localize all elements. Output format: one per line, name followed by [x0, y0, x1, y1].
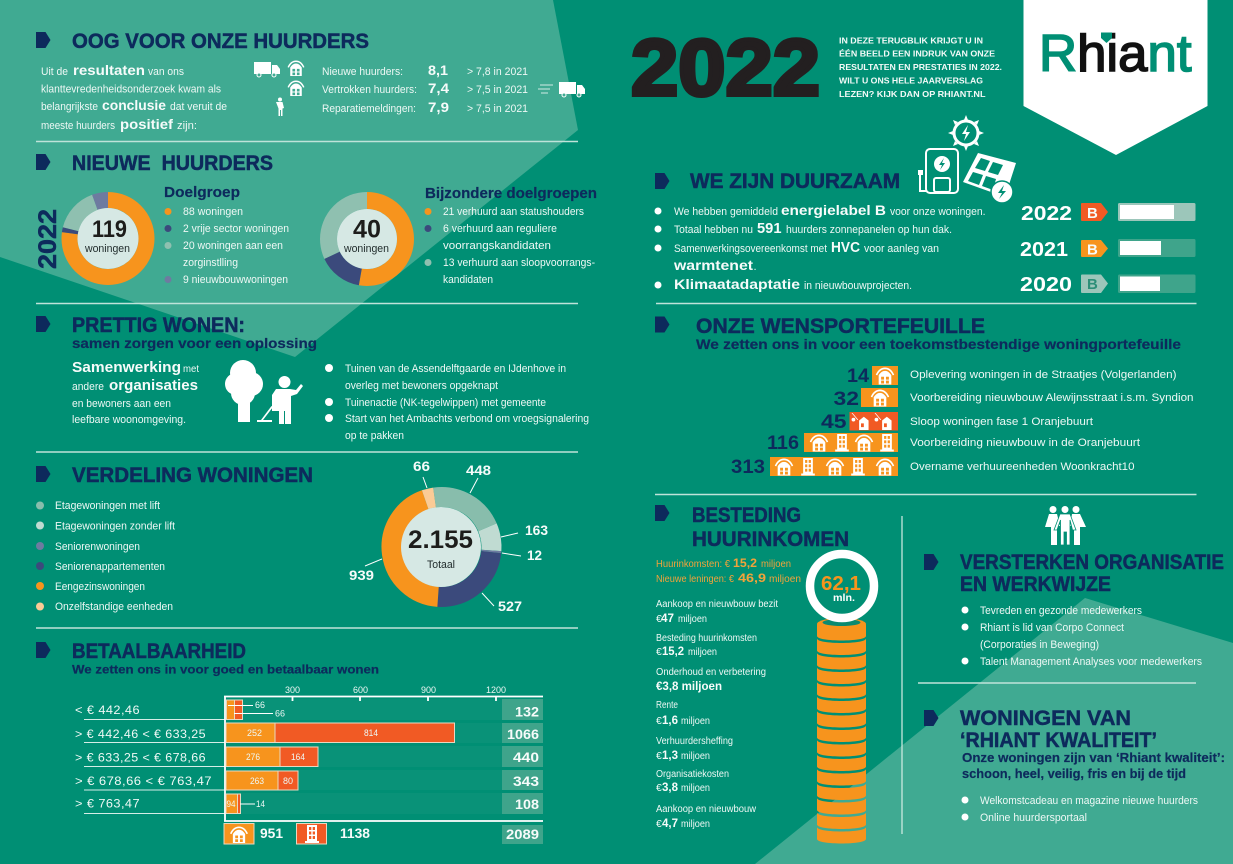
text block: Samenwerking: [72, 359, 181, 376]
bar chart: 600: [353, 685, 368, 695]
legend: Eengezinswoningen: [55, 581, 145, 593]
big year title: 2022: [631, 23, 820, 112]
spending list: Rente: [656, 700, 678, 711]
spending list: Aankoop en nieuwbouw: [656, 804, 757, 815]
bar chart: 14: [256, 799, 265, 809]
icon: house: [288, 60, 304, 76]
panel: woningen van rhiant kwaliteit: schoon, heel, veilig, fris en bij de tijd: [962, 766, 1186, 781]
heading: VERDELING WONINGEN: [72, 464, 313, 487]
row: 14: 14: [847, 366, 869, 387]
spending list: 1,3: [662, 748, 678, 762]
bullet list: voor onze woningen.: [890, 206, 986, 218]
chart legend: house total: 951: [260, 825, 283, 841]
background shape: top left: [0, 0, 578, 357]
label row 2022: B: [1087, 205, 1098, 222]
donut chart: total: [385, 491, 498, 603]
total circle: [810, 554, 874, 618]
income totals: Huurinkomsten: €: [656, 559, 730, 570]
row totals: 343: [513, 773, 539, 789]
intro text: van ons: [148, 66, 184, 78]
donut labels: 527: [498, 598, 522, 614]
bullet list: warmtenet: [673, 257, 753, 273]
total circle: mln.: [833, 593, 855, 604]
intro text: [839, 36, 1002, 99]
intro text: LEZEN? KIJK DAN OP RHIANT.NL: [839, 89, 986, 99]
donut labels: 163: [525, 522, 548, 538]
donut labels: 939: [349, 567, 374, 583]
spending list: Organisatiekosten: [656, 769, 729, 780]
panel: woningen van rhiant kwaliteit: ‘RHIANT KWALITEIT’: [960, 729, 1157, 752]
donut labels: 12: [527, 547, 542, 563]
intro text: Uit de: [41, 66, 68, 78]
section marker: [36, 316, 50, 332]
row: 32: Voorbereiding nieuwbouw Alewijnsstraat i.s.m. Syndion: [910, 392, 1194, 404]
row: 45: [821, 412, 1093, 433]
scores table: > 7,5 in 2021: [467, 103, 528, 115]
bullet list: HVC: [831, 240, 860, 256]
spending list: 1,6: [662, 713, 678, 727]
spending list: €: [656, 782, 662, 794]
bullet list: in nieuwbouwprojecten.: [804, 280, 912, 292]
text block: leefbare woonomgeving.: [72, 414, 186, 426]
spending list: [656, 599, 778, 830]
label row 2021: 2021: [1020, 239, 1068, 261]
icon: three people: [1045, 506, 1086, 545]
panel: versterken organisatie: EN WERKWIJZE: [960, 573, 1111, 596]
spending list: Verhuurdersheffing: [656, 736, 733, 747]
bullet list: Talent Management Analyses voor medewerkers: [980, 656, 1202, 668]
text block: [72, 359, 199, 426]
legend: doelgroep: 20 woningen aan een: [183, 240, 283, 252]
bar chart: 94: [226, 799, 236, 809]
legend: Seniorenappartementen: [55, 561, 165, 573]
bar chart: 66: [255, 700, 265, 710]
bar chart: 263: [250, 776, 264, 786]
row labels: [75, 703, 225, 814]
heading: NIEUWE HUURDERS: [72, 152, 273, 175]
panel: besteding huurinkomen: HUURINKOMEN: [692, 528, 849, 551]
row: 45: 45: [821, 412, 847, 433]
bullet list: 591: [757, 220, 782, 237]
donut chart: doelgroep: [70, 200, 146, 277]
bullet list: [962, 605, 1202, 668]
heading: BESTEDING: [692, 504, 801, 527]
spending list: miljoen: [681, 782, 710, 794]
heading: WONINGEN VAN: [960, 707, 1131, 730]
bullet list: Start van het Ambachts verbond om vroegsignalering: [345, 413, 589, 425]
bullet list: Tevreden en gezonde medewerkers: [980, 605, 1142, 617]
label row 2020: [1020, 274, 1196, 296]
intro text: positief: [120, 116, 173, 132]
panel: prettig wonen: [36, 314, 589, 442]
intro text: dat veruit de: [170, 101, 227, 113]
legend: bijzondere doelgroepen: kandidaten: [443, 274, 493, 286]
legend: bijzondere doelgroepen: 6 verhuurd aan reguliere: [443, 223, 557, 235]
subheading: We zetten ons in voor goed en betaalbaar wonen: [72, 662, 379, 676]
row totals: 440: [513, 749, 539, 765]
intro text: meeste huurders: [41, 120, 115, 132]
section marker: [36, 642, 50, 658]
label row 2021: B: [1087, 242, 1098, 258]
subheading: samen zorgen voor een oplossing: [72, 335, 317, 351]
section marker: [924, 710, 938, 726]
panel: we zijn duurzaam: [654, 115, 1196, 296]
bullet list: .: [754, 261, 757, 273]
text block: andere: [72, 381, 104, 393]
spending list: Besteding huurinkomsten: [656, 633, 757, 644]
row: 116: [767, 433, 1140, 454]
bullet list: energielabel B: [781, 203, 886, 218]
bullet list: Klimaatadaptatie: [674, 276, 800, 292]
panel: nieuwe huurders: [34, 152, 597, 286]
spending list: €: [656, 818, 662, 830]
donut chart: doelgroep: woningen: [84, 243, 130, 255]
row labels: < € 442,46: [75, 703, 140, 717]
intro text: IN DEZE TERUGBLIK KRIJGT U IN: [839, 36, 983, 46]
bar chart: 814: [364, 728, 378, 738]
row labels: > € 442,46 < € 633,25: [75, 727, 206, 741]
legend: bijzondere doelgroepen: voorrangskandidaten: [443, 240, 551, 252]
label row 2022: 2022: [1021, 203, 1072, 225]
bullet list: op te pakken: [345, 430, 404, 442]
bar chart: 276: [246, 752, 260, 762]
bullet list: (Corporaties in Beweging): [980, 639, 1099, 651]
section marker: [655, 505, 670, 521]
icon: sun and solar panels: [918, 115, 1016, 203]
logo badge: [1024, 0, 1208, 155]
spending list: Aankoop en nieuwbouw bezit: [656, 599, 778, 610]
row totals: 2089: [506, 826, 539, 842]
row totals: 108: [515, 796, 539, 812]
bar chart: 1200: [486, 685, 506, 695]
subheading: Onze woningen zijn van ‘Rhiant kwaliteit’:: [962, 750, 1225, 765]
row totals: 132: [515, 704, 539, 720]
bar chart: 66: [275, 708, 285, 718]
bullet list: We hebben gemiddeld: [674, 206, 778, 218]
spending list: miljoen: [681, 750, 710, 762]
label row 2022: [1021, 203, 1196, 225]
legend: Etagewoningen zonder lift: [55, 520, 175, 532]
bullet list: [654, 203, 986, 292]
legend: Seniorenwoningen: [55, 541, 140, 553]
coin stack: [817, 618, 866, 844]
bar chart: [224, 685, 543, 821]
chart legend: house total: [224, 824, 283, 844]
scores table: > 7,8 in 2021: [467, 66, 528, 78]
background shape: bottom right: [755, 598, 1233, 864]
bullet list: Online huurdersportaal: [980, 812, 1087, 824]
intro text: conclusie: [102, 97, 166, 113]
income totals: 15,2: [733, 556, 757, 570]
heading: BETAALBAARHEID: [72, 640, 246, 663]
income totals: 46,9: [738, 571, 766, 585]
donut chart: bijzondere doelgroepen: 40: [353, 216, 381, 244]
section marker: [655, 316, 670, 332]
heading: OOG VOOR ONZE HUURDERS: [72, 30, 369, 53]
spending list: 3,8: [662, 780, 678, 794]
label row 2021: [1020, 239, 1196, 261]
scores table: Vertrokken huurders:: [322, 84, 417, 96]
spending list: €: [656, 613, 662, 625]
legend: doelgroep: 88 woningen: [183, 206, 243, 218]
heading: WE ZIJN DUURZAAM: [690, 170, 900, 193]
chart legend: apartment total: [296, 824, 370, 844]
section marker: [36, 32, 50, 48]
donut chart: total: 2.155: [408, 526, 473, 554]
legend: Onzelfstandige eenheden: [55, 601, 173, 613]
spending list: 15,2: [662, 644, 684, 658]
bar chart: 300: [285, 685, 300, 695]
panel: onze wensportefeuille: [655, 315, 1194, 478]
row labels: > € 633,25 < € 678,66: [75, 750, 206, 764]
income totals: Nieuwe leningen: €: [656, 574, 734, 585]
row: 313: Overname verhuureenheden Woonkracht10: [910, 461, 1134, 473]
bullet list: Tuinenactie (NK-tegelwippen) met gemeente: [345, 397, 546, 409]
energy labels: [1020, 203, 1196, 296]
legend: doelgroep: [164, 184, 289, 286]
bullet list: Totaal hebben nu: [674, 224, 753, 236]
bullet list: Welkomstcadeau en magazine nieuwe huurders: [980, 795, 1198, 807]
bullet list: overleg met bewoners opgeknapt: [345, 380, 498, 392]
spending list: €3,8 miljoen: [656, 679, 722, 693]
icon: person: [276, 98, 284, 116]
text block: met: [183, 364, 199, 375]
chart legend: apartment total: 1138: [340, 825, 370, 841]
intro text: RESULTATEN EN PRESTATIES IN 2022.: [839, 62, 1002, 72]
panel: verdeling woningen: [36, 458, 548, 614]
panel: woningen van rhiant kwaliteit: [924, 707, 1225, 824]
label row 2020: B: [1087, 276, 1098, 293]
row labels: > € 678,66 < € 763,47: [75, 774, 212, 788]
bullet list: Tuinen van de Assendelftgaarde en IJdenhove in: [345, 363, 566, 375]
total circle: 62,1: [821, 573, 861, 595]
scores table: Reparatiemeldingen:: [322, 103, 416, 115]
scores table: 7,4: [428, 80, 449, 96]
legend: Etagewoningen met lift: [55, 500, 160, 512]
donut chart: total: Totaal: [427, 559, 455, 571]
intro text: zijn:: [177, 120, 197, 132]
legend: bijzondere doelgroepen: Bijzondere doelgroepen: [425, 185, 597, 202]
income totals: miljoen: [769, 574, 801, 585]
intro text: klanttevredenheidsonderzoek kwam als: [41, 84, 221, 96]
section marker: [924, 554, 938, 570]
row totals: 1066: [507, 726, 539, 742]
vertical year: 2022: [34, 209, 62, 269]
spending list: 4,7: [662, 816, 678, 830]
spending list: miljoen: [681, 715, 710, 727]
bullet list: [962, 795, 1198, 824]
icon: tree and gardener: [225, 360, 303, 424]
donut labels: 66: [413, 458, 430, 474]
intro text: resultaten: [73, 62, 145, 78]
heading: ONZE WENSPORTEFEUILLE: [696, 315, 985, 338]
spending list: miljoen: [681, 818, 710, 830]
bar chart: 164: [291, 752, 305, 762]
heading: PRETTIG WONEN:: [72, 314, 245, 337]
icon: moving truck: [254, 62, 280, 77]
panel: oog voor onze huurders: [36, 30, 585, 132]
scores table: [322, 62, 528, 115]
legend: doelgroep: 2 vrije sector woningen: [183, 223, 289, 235]
bar chart: 80: [283, 776, 293, 786]
text block: organisaties: [109, 377, 198, 394]
income totals: [656, 556, 801, 585]
row: 313: 313: [731, 457, 765, 478]
scores table: 7,9: [428, 99, 449, 115]
row: 45: Sloop woningen fase 1 Oranjebuurt: [910, 416, 1093, 428]
legend: bijzondere doelgroepen: 21 verhuurd aan statushouders: [443, 206, 584, 218]
donut chart: bijzondere doelgroepen: [328, 200, 406, 278]
bar chart: 252: [247, 728, 262, 738]
bullet list: voor aanleg van: [864, 243, 939, 255]
spending list: 47: [661, 611, 674, 625]
donut chart: doelgroep: 119: [92, 216, 127, 243]
logo badge: Rhiant: [1039, 25, 1192, 83]
bullet list: Samenwerkingsovereenkomst met: [674, 243, 827, 255]
row: 32: [834, 388, 1194, 410]
section marker: [655, 173, 670, 189]
spending list: €: [656, 646, 662, 658]
donut labels: 448: [466, 462, 491, 478]
icon: truck leaving: [538, 82, 585, 97]
intro text: [41, 62, 227, 132]
row: 14: Oplevering woningen in de Straatjes (Volgerlanden): [910, 369, 1176, 381]
scores table: 8,1: [428, 62, 448, 78]
legend: [36, 500, 175, 613]
row: 116: 116: [767, 433, 799, 454]
panel: betaalbaarheid: [36, 640, 543, 844]
section marker: [36, 466, 50, 482]
legend: doelgroep: 9 nieuwbouwwoningen: [183, 274, 288, 286]
row labels: > € 763,47: [75, 796, 140, 810]
row: 313: [731, 457, 1134, 478]
spending list: miljoen: [678, 613, 707, 625]
scores table: > 7,5 in 2021: [467, 84, 528, 96]
legend: doelgroep: zorginstlling: [183, 257, 238, 269]
legend: bijzondere doelgroepen: [424, 185, 597, 286]
row: 32: 32: [834, 389, 859, 410]
label row 2020: 2020: [1020, 274, 1072, 296]
row: 116: Voorbereiding nieuwbouw in de Oranjebuurt: [910, 437, 1140, 449]
row totals: [502, 699, 543, 844]
text block: en bewoners aan een: [72, 398, 171, 410]
legend: doelgroep: Doelgroep: [164, 184, 240, 201]
scores table: Nieuwe huurders:: [322, 66, 403, 78]
icon: house repair: [288, 80, 304, 96]
intro text: ÉÉN BEELD EEN INDRUK VAN ONZE: [839, 48, 995, 58]
spending list: miljoen: [688, 646, 717, 658]
section marker: [36, 154, 50, 170]
panel: besteding huurinkomen: [655, 504, 874, 844]
income totals: miljoen: [761, 559, 791, 570]
spending list: €: [656, 750, 662, 762]
bullet list: Rhiant is lid van Corpo Connect: [980, 622, 1124, 634]
bullet list: huurders zonnepanelen op hun dak.: [786, 224, 952, 236]
panel: versterken organisatie: [924, 506, 1224, 668]
intro text: belangrijkste: [41, 101, 98, 113]
intro text: WILT U ONS HELE JAARVERSLAG: [839, 76, 983, 86]
row: 14: [847, 366, 1176, 387]
spending list: Onderhoud en verbetering: [656, 667, 766, 678]
spending list: €: [656, 715, 662, 727]
bullet list: [325, 363, 589, 442]
donut labels: [349, 458, 548, 614]
bar chart: 900: [421, 685, 436, 695]
donut chart: bijzondere doelgroepen: woningen: [343, 243, 389, 255]
legend: bijzondere doelgroepen: 13 verhuurd aan sloopvoorrangs-: [443, 257, 595, 269]
subheading: We zetten ons in voor een toekomstbestendige woningportefeuille: [696, 337, 1182, 352]
